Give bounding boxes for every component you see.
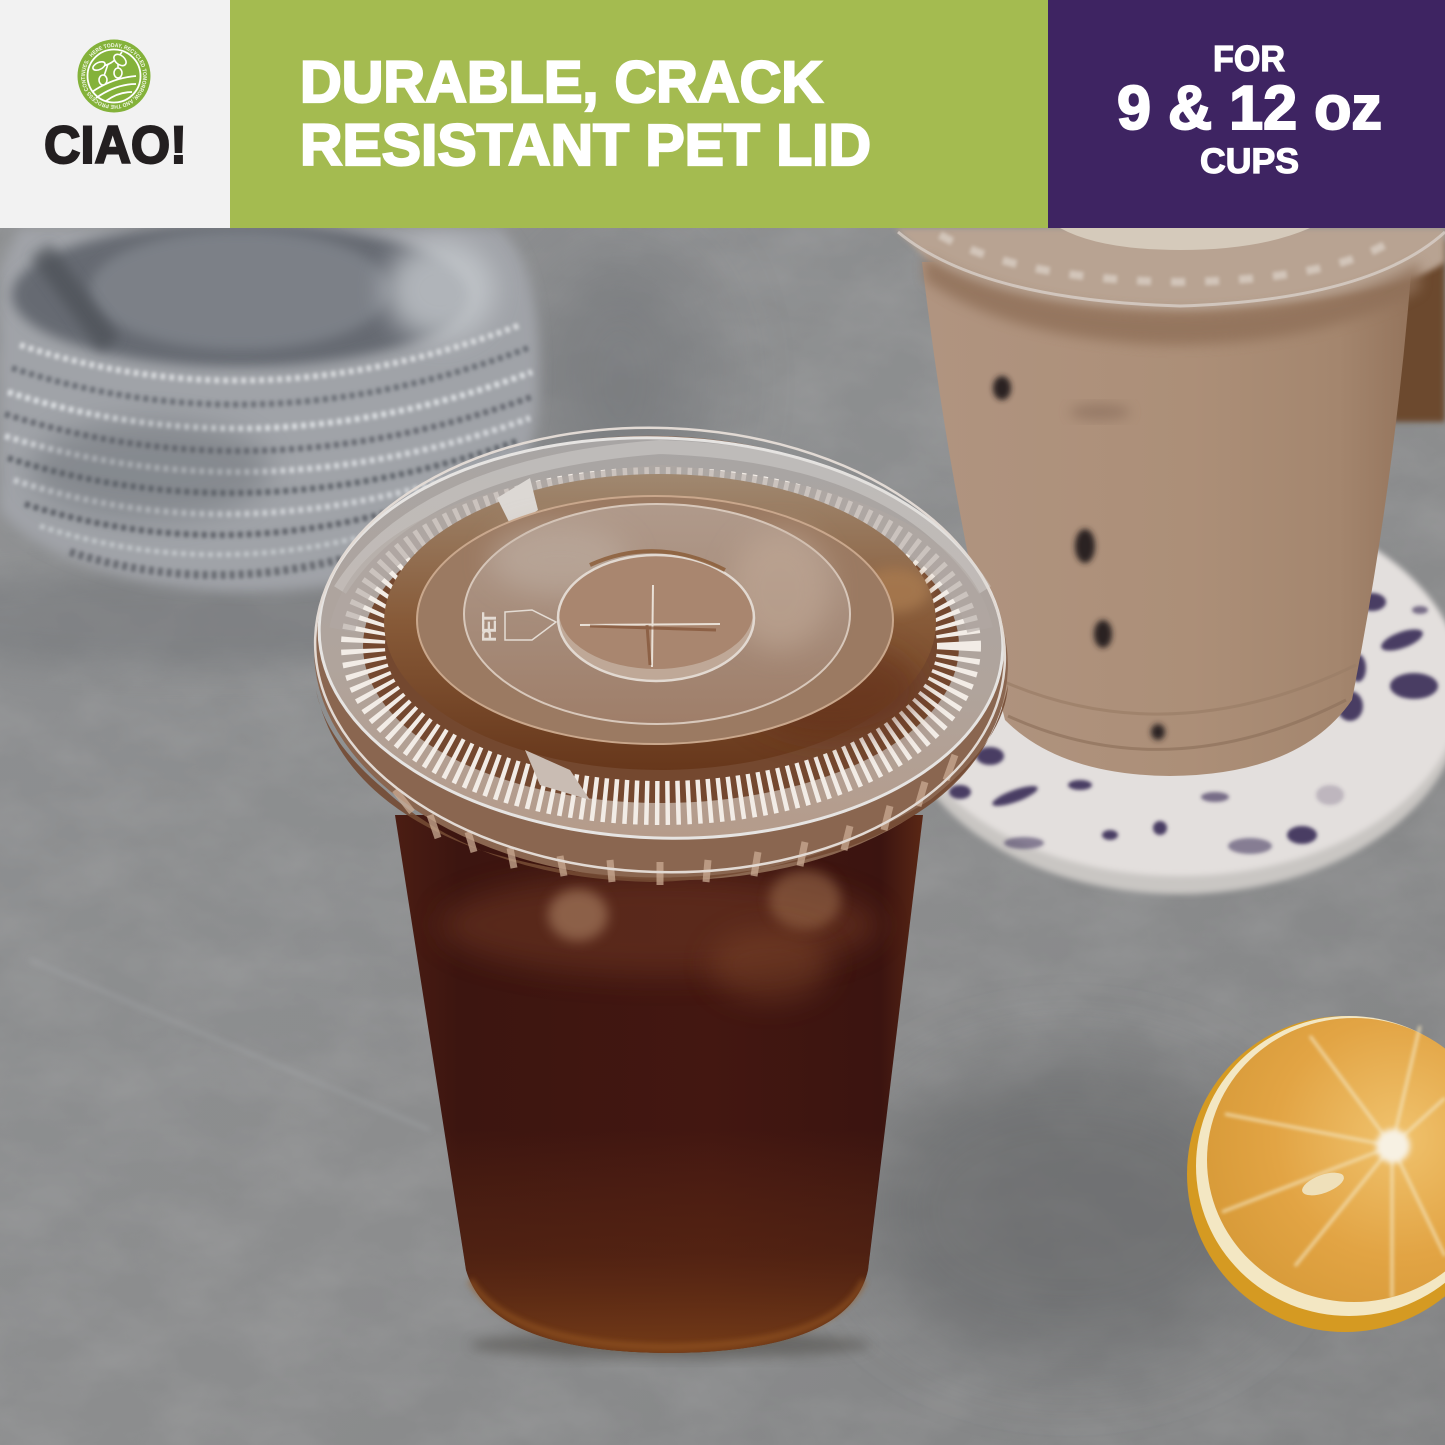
main iced tea cup bbox=[395, 815, 923, 1359]
lid outer skirt bbox=[306, 424, 1016, 892]
PET recycling mark: PET bbox=[479, 612, 501, 642]
raised dome bbox=[417, 496, 893, 744]
heading: RESISTANT PET LID bbox=[300, 113, 871, 178]
flat disk bbox=[464, 504, 850, 724]
size text: 9 & 12 oz bbox=[1117, 74, 1382, 143]
radial ribbed ring bbox=[363, 560, 959, 803]
size text bbox=[1117, 38, 1382, 181]
wooden block, background right bbox=[1392, 240, 1445, 422]
heading bbox=[300, 50, 871, 178]
tab notches bbox=[497, 478, 538, 522]
clear PET lid with straw slot bbox=[306, 416, 1016, 892]
rim highlight at top bbox=[340, 447, 985, 590]
header: cup size panel bbox=[1048, 0, 1445, 228]
lemon slice bbox=[1187, 1016, 1445, 1332]
cross straw slit bbox=[580, 585, 720, 667]
size text: FOR bbox=[1213, 38, 1285, 79]
header: headline panel bbox=[230, 0, 1048, 228]
straw recess circle bbox=[559, 617, 752, 680]
stack of clear lids, background left bbox=[0, 223, 539, 591]
icon: olive badge: HERE TODAY, RECYCLED TOMORROW, AND THE PROCESS CONTINUES. bbox=[81, 43, 147, 109]
liquid seen through lid bbox=[384, 474, 936, 770]
heading: DURABLE, CRACK bbox=[300, 50, 823, 115]
terrazzo coaster bbox=[936, 547, 1445, 897]
PET recycling mark bbox=[479, 610, 556, 642]
header: logo panel bbox=[0, 0, 230, 228]
milk tea cup, background bbox=[895, 228, 1445, 776]
size text: CUPS bbox=[1200, 142, 1299, 181]
wordmark: CIAO! bbox=[44, 116, 187, 175]
